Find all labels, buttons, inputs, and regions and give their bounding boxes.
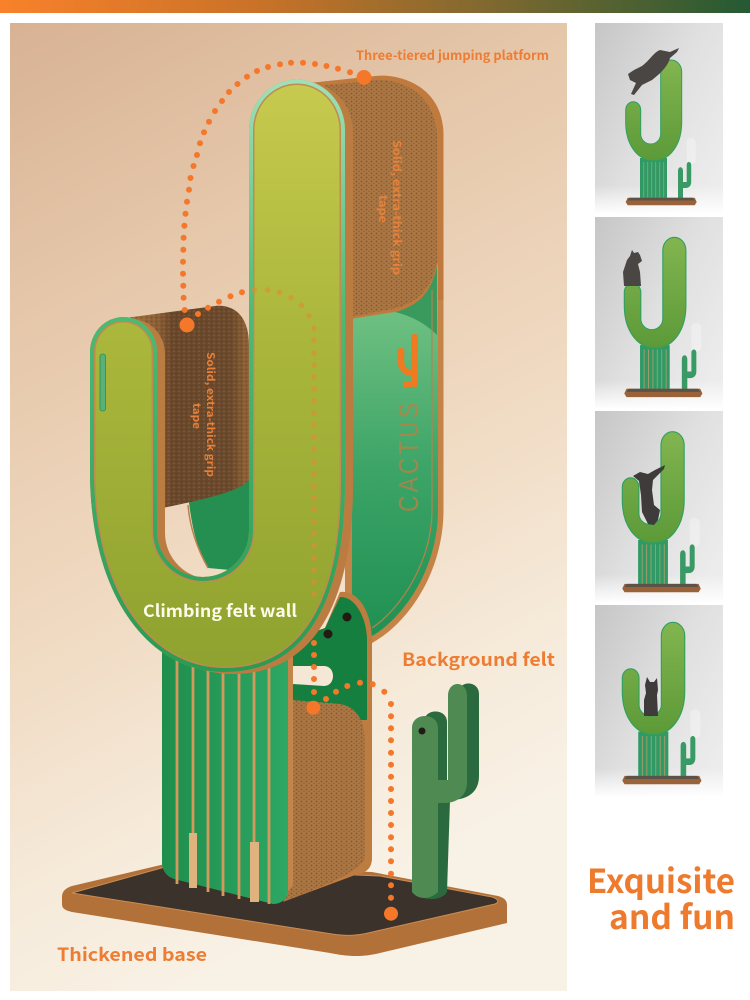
headline: Exquisite and fun <box>587 855 735 939</box>
hand slot <box>100 354 106 411</box>
photo panel 4: cat sitting in the curve <box>595 605 723 796</box>
hanging slot <box>293 666 333 686</box>
panel background <box>10 23 567 991</box>
climbing felt wall: front U shape <box>90 79 353 674</box>
vertical label: grip tape, upper: Solid, extra-thick grip <box>389 140 405 275</box>
cat <box>623 250 642 286</box>
top gradient bar <box>0 0 750 13</box>
tabs <box>189 833 197 888</box>
dotted callout: faint dots across felt <box>254 290 314 594</box>
CACTUS engraved wordmark: CACTUS <box>394 403 425 512</box>
dotted callout: upper platform <box>183 63 364 325</box>
photo panel 2: cat sitting on top <box>595 217 723 408</box>
label: thickened base: Thickened base <box>57 941 207 967</box>
panel: main product photo <box>10 23 567 991</box>
label: three-tiered jumping platform: Three-tiered jumping platform <box>356 45 549 64</box>
headline: Exquisite and fun: Exquisite <box>587 855 735 903</box>
back plate of the cactus <box>186 250 444 643</box>
trunk with stripes <box>162 640 293 904</box>
screw holes <box>324 612 352 638</box>
lower scratching cardboard <box>125 306 249 508</box>
base platform <box>62 864 507 956</box>
photo panel 1: cat leaping <box>595 23 723 213</box>
cardboard block <box>283 700 365 902</box>
rear upright plate with slot and cardboard block <box>283 592 372 902</box>
cat <box>644 677 658 716</box>
icon: orange cactus logo <box>401 334 418 387</box>
upper scratching cardboard: tape <box>375 195 391 224</box>
small felt cactus <box>412 684 479 899</box>
vertical label: grip tape, lower: Solid, extra-thick grip <box>204 352 219 477</box>
cat <box>628 48 679 95</box>
lower scratching cardboard: tape <box>190 403 205 429</box>
cat <box>633 465 665 525</box>
upper scratching cardboard <box>300 76 444 319</box>
photo panel 3: cat climbing <box>595 411 723 602</box>
headline: Exquisite and fun: and fun <box>609 891 735 939</box>
label: climbing felt wall: Climbing felt wall <box>143 597 297 622</box>
label: background felt: Background felt <box>402 646 555 672</box>
dotted callout: background felt and base <box>313 643 391 914</box>
